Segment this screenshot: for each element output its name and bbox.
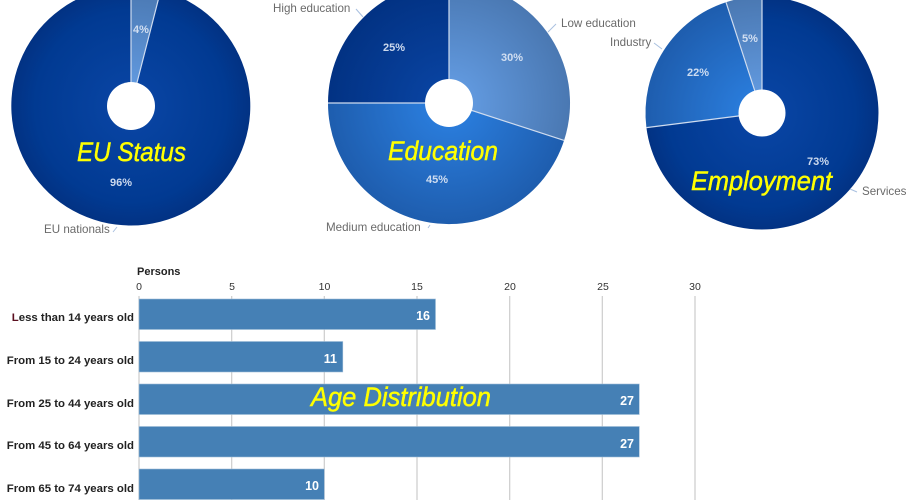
leader line: High education (356, 9, 363, 17)
axis tick labels: 25 (597, 281, 609, 293)
leader line: Industry (654, 43, 662, 49)
bar: From 25 to 44 years old (7, 384, 639, 414)
label: 22%: 22% (687, 67, 709, 79)
donut hole (738, 90, 786, 136)
label: 73%: 73% (807, 156, 829, 168)
title: Education: Education (388, 136, 498, 166)
leader line: Medium education (428, 225, 430, 228)
bar: From 45 to 64 years old (7, 426, 639, 457)
bar: From 45 to 64 years old: 27 (620, 437, 634, 451)
bar: From 15 to 24 years old (7, 342, 343, 372)
label: Industry: Industry (610, 36, 651, 49)
bar: Less than 14 years old (12, 299, 436, 330)
bar: From 15 to 24 years old: From 15 to 24 years old (7, 355, 134, 367)
bar: From 65 to 74 years old (7, 469, 324, 500)
bar: Less than 14 years old: Less than 14 years old (12, 312, 134, 324)
title: EU Status: EU Status (77, 137, 186, 167)
slice: Low education 30% (449, 0, 570, 140)
leader line: EU nationals (113, 227, 117, 232)
axis tick labels: 0 (136, 281, 142, 293)
axis title: Persons: Persons (137, 266, 180, 278)
slice: Services 73% (646, 0, 878, 230)
slice separators (328, 0, 564, 140)
axis tick labels: 5 (229, 281, 235, 293)
slice: other 5% (726, 0, 762, 113)
bar: From 45 to 64 years old: From 45 to 64 years old (7, 440, 134, 452)
label: Services: Services (862, 185, 907, 198)
label: Medium education: Medium education (326, 221, 421, 234)
leader line: Services (850, 189, 857, 192)
bar: From 25 to 44 years old: 27 (620, 394, 634, 408)
slice: non-EU 4% (131, 0, 161, 106)
label: 45%: 45% (426, 174, 448, 186)
axis tick labels (136, 281, 701, 293)
axis tick labels: 20 (504, 281, 516, 293)
label: High education: High education (273, 2, 350, 15)
label: EU nationals: EU nationals (44, 223, 110, 236)
bar chart: Age Distribution (7, 266, 701, 500)
axis tick labels: 30 (689, 281, 701, 293)
leader line: Low education (548, 24, 556, 32)
label: 30%: 30% (501, 52, 523, 64)
slice separators (646, 0, 762, 128)
label: Low education: Low education (561, 17, 636, 30)
axis tick labels: 15 (411, 281, 423, 293)
slice: EU nationals 96% (11, 0, 250, 225)
donut chart: Education (273, 0, 636, 234)
bar: From 65 to 74 years old: 10 (305, 479, 319, 493)
bar: From 15 to 24 years old: 11 (324, 352, 337, 366)
bar: Less than 14 years old: 16 (416, 309, 430, 323)
label: 4%: 4% (133, 24, 149, 36)
label: 25%: 25% (383, 42, 405, 54)
donut chart: EU Status (11, 0, 250, 236)
donut hole (425, 79, 473, 127)
donut hole (107, 82, 155, 130)
slice: Medium education 45% (328, 103, 564, 224)
donut chart: Employment (610, 0, 907, 229)
title: Employment: Employment (691, 166, 833, 196)
label: 5%: 5% (742, 33, 758, 45)
bar: From 25 to 44 years old: From 25 to 44 years old (7, 398, 134, 410)
slice: High education 25% (328, 0, 449, 103)
slice: Industry 22% (645, 2, 762, 128)
bar: From 65 to 74 years old: From 65 to 74 years old (7, 483, 134, 495)
label: 96%: 96% (110, 177, 132, 189)
title: Age Distribution: Age Distribution (309, 382, 491, 412)
axis tick labels: 10 (319, 281, 330, 293)
